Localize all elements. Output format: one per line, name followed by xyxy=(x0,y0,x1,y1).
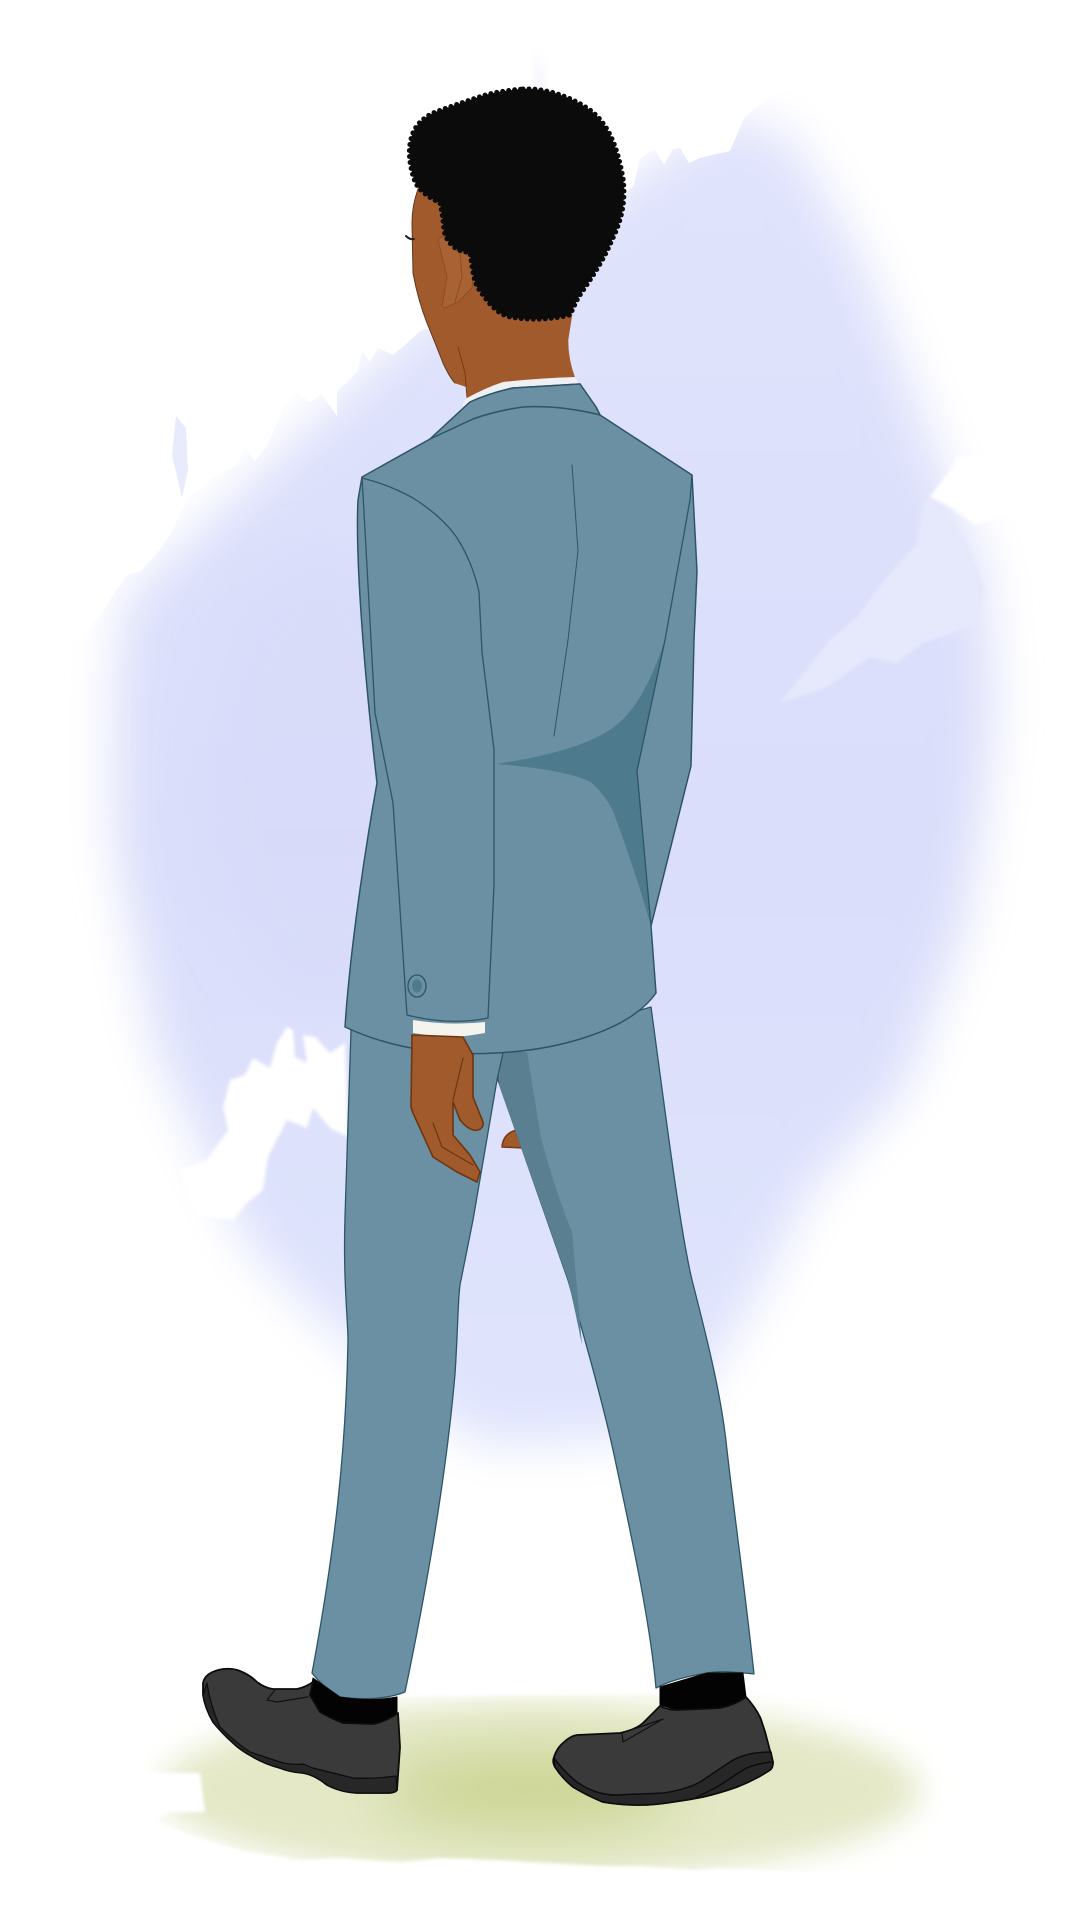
illustration: man in blue suit walking away xyxy=(98,86,1010,1871)
eyelash xyxy=(406,236,414,239)
lighter streak, right side xyxy=(780,497,985,703)
ground shadow: olive wash xyxy=(140,1702,920,1878)
back hand finger xyxy=(502,1130,524,1148)
jacket waist shadow xyxy=(496,640,665,926)
ear xyxy=(438,237,473,308)
white notch in ground xyxy=(140,1770,205,1820)
sock: left xyxy=(310,1678,397,1724)
hair xyxy=(409,89,624,319)
sock: right xyxy=(660,1673,746,1710)
trousers: left leg xyxy=(312,1030,503,1699)
jacket sleeve xyxy=(362,478,494,1021)
faint wisps xyxy=(535,45,545,105)
trousers: right leg xyxy=(498,1007,754,1688)
hand xyxy=(411,1035,483,1182)
shoe: left xyxy=(203,1669,400,1793)
jacket xyxy=(345,384,697,1054)
shoe: right xyxy=(553,1697,773,1805)
background: lavender watercolor wash xyxy=(115,45,1020,1445)
jacket body xyxy=(345,384,697,1054)
white notch, right side xyxy=(930,450,1020,525)
shirt cuff xyxy=(413,1020,485,1038)
sleeve button xyxy=(408,975,426,997)
white torn patch xyxy=(180,1027,348,1220)
head and neck xyxy=(406,188,575,400)
jacket collar xyxy=(430,384,600,439)
figure xyxy=(203,89,773,1805)
shirt collar xyxy=(462,377,582,412)
